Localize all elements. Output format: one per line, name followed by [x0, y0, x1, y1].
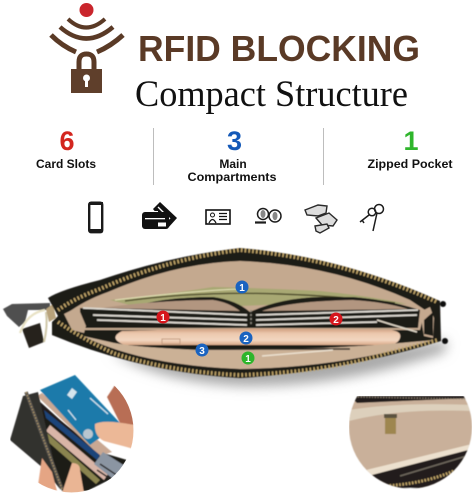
stat: 6 card slots: 6 — [59, 126, 75, 156]
icon: keys — [360, 204, 384, 231]
lower dark — [372, 450, 468, 489]
icon: ID card — [206, 210, 230, 224]
side lining left — [64, 307, 86, 333]
beige pocket edge — [37, 393, 112, 456]
marker: blue 2 — [240, 332, 252, 345]
marker: blue 1: 1 — [239, 283, 245, 294]
top lining — [66, 261, 425, 330]
stat: 3 main compartments: Compartments — [188, 170, 277, 184]
marker: red 2: 2 — [333, 315, 339, 326]
light strip — [349, 404, 472, 421]
marker: blue 2: 2 — [243, 334, 249, 345]
right fingers — [107, 385, 134, 425]
stat: 3 main compartments: 3 — [227, 126, 242, 156]
dark slit under phone — [118, 345, 400, 350]
zipper end stops — [440, 301, 448, 344]
stat: 1 zipped pocket: Zipped Pocket — [368, 157, 453, 171]
marker: green 1: 1 — [245, 354, 251, 365]
grey card stack — [94, 452, 125, 478]
right card slots — [256, 310, 418, 325]
zipper pull — [385, 417, 396, 434]
divider right — [323, 128, 324, 185]
marker: red 1 — [156, 310, 170, 324]
inner dark pockets — [80, 297, 420, 328]
heading: RFID BLOCKING: RFID BLOCKING — [138, 28, 420, 69]
money — [110, 287, 407, 306]
stat: 1 zipped pocket — [368, 126, 453, 171]
wrist strap — [3, 303, 56, 348]
stat: 3 main compartments — [188, 126, 277, 184]
side lining right — [420, 307, 434, 338]
bottom zipper teeth — [58, 322, 438, 375]
icon: cards — [142, 202, 177, 229]
wallet shadow — [110, 340, 447, 386]
lower teeth — [380, 471, 454, 486]
blue travel card — [40, 375, 120, 445]
stat: 6 card slots — [36, 126, 96, 171]
wallet — [3, 248, 448, 386]
blue card — [44, 410, 100, 460]
marker: green 1 — [242, 352, 254, 365]
icon: phone — [89, 202, 103, 232]
phone — [115, 329, 400, 345]
lower lining — [83, 336, 434, 369]
cream band — [366, 444, 472, 476]
zipper — [26, 392, 62, 489]
icon: RFID lock — [51, 3, 123, 93]
divider left — [153, 128, 154, 185]
icon: banknotes — [305, 205, 337, 233]
stat: 3 main compartments: Main — [219, 157, 247, 171]
bottom fingers — [38, 458, 57, 491]
heading: Compact Structure: Compact Structure — [135, 74, 408, 115]
icon: coins — [255, 208, 281, 222]
photo: inner zip pocket — [349, 396, 473, 495]
marker: red 2 — [330, 312, 342, 326]
thumb — [95, 422, 134, 449]
left card slots — [83, 308, 247, 325]
dark interior — [42, 410, 126, 492]
pink stripe — [46, 425, 108, 480]
dark flap — [10, 392, 60, 489]
wallet body — [48, 248, 441, 378]
wrist strap and wallet photo — [3, 248, 448, 378]
center seam — [250, 310, 252, 326]
stat: 1 zipped pocket: 1 — [403, 126, 419, 156]
marker: blue 3: 3 — [199, 346, 205, 357]
top edge — [349, 396, 472, 403]
marker: blue 3 — [196, 344, 208, 357]
top zipper teeth — [58, 250, 437, 310]
olive stripe — [46, 432, 100, 484]
photo: card in hand — [10, 375, 134, 493]
marker: blue 1 — [236, 280, 248, 294]
stat: 6 card slots: Card Slots — [36, 157, 96, 171]
marker: red 1: 1 — [160, 313, 166, 324]
